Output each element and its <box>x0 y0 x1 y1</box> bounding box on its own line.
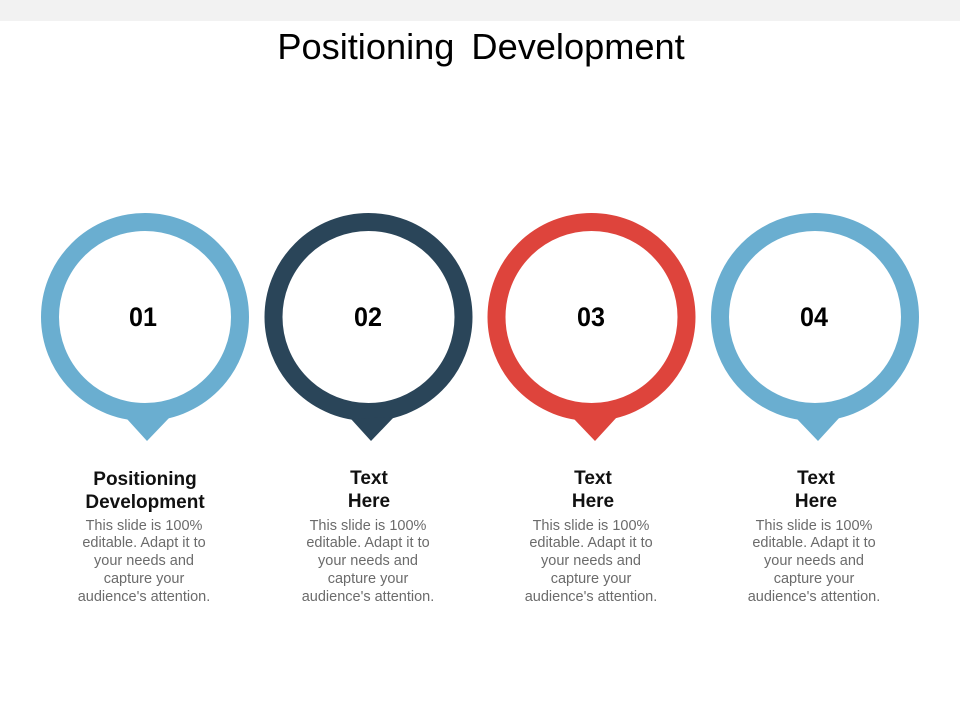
icon: pin 01 <box>50 222 240 441</box>
number 03: 03 <box>577 302 605 332</box>
text block 2 <box>302 518 434 605</box>
heading 2: Here <box>348 491 390 512</box>
text block 1: editable. Adapt it to <box>82 535 206 551</box>
text block 3: This slide is 100% <box>533 518 649 534</box>
heading 2 <box>348 468 390 512</box>
text block 3: capture your <box>551 571 631 587</box>
text block 3: editable. Adapt it to <box>529 535 653 551</box>
heading 4: Text <box>797 468 835 489</box>
heading 1: Positioning <box>93 469 197 490</box>
text block 2: your needs and <box>318 553 418 569</box>
text block 4: capture your <box>774 571 854 587</box>
text block 4: audience's attention. <box>748 589 880 605</box>
heading 4: Here <box>795 491 837 512</box>
top grey band <box>0 0 960 21</box>
heading 3 <box>572 468 614 512</box>
icon: pin 02 <box>274 222 464 441</box>
text block 2: audience's attention. <box>302 589 434 605</box>
title: Positioning Development <box>277 26 685 67</box>
text block 4: This slide is 100% <box>756 518 872 534</box>
heading 3: Here <box>572 491 614 512</box>
text block 2: This slide is 100% <box>310 518 426 534</box>
heading 2: Text <box>350 468 388 489</box>
heading 4 <box>795 468 837 512</box>
text block 1: audience's attention. <box>78 589 210 605</box>
icon: pin 04 <box>720 222 910 441</box>
heading 3: Text <box>574 468 612 489</box>
text block 3: your needs and <box>541 553 641 569</box>
number 02: 02 <box>354 302 382 332</box>
heading 1: Development <box>85 492 205 513</box>
text block 3 <box>525 518 657 605</box>
text block 1: This slide is 100% <box>86 518 202 534</box>
text block 1: capture your <box>104 571 184 587</box>
icon: pin 03 <box>496 222 686 441</box>
text block 2: editable. Adapt it to <box>306 535 430 551</box>
number 04: 04 <box>800 302 828 332</box>
text block 4: editable. Adapt it to <box>752 535 876 551</box>
text block 1: your needs and <box>94 553 194 569</box>
heading 1 <box>85 469 205 513</box>
text block 4 <box>748 518 880 605</box>
text block 1 <box>78 518 210 605</box>
text block 2: capture your <box>328 571 408 587</box>
text block 4: your needs and <box>764 553 864 569</box>
text block 3: audience's attention. <box>525 589 657 605</box>
number 01: 01 <box>129 302 157 332</box>
